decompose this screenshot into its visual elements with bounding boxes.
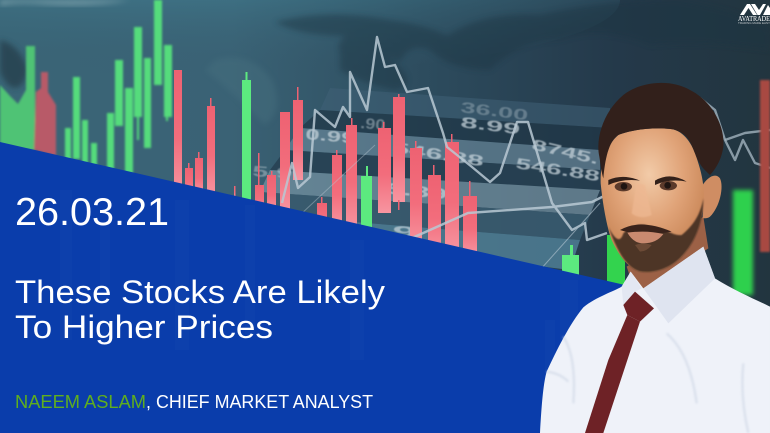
date: 26.03.21 (15, 191, 169, 234)
author byline: , CHIEF MARKET ANALYST (146, 391, 373, 412)
headline: To Higher Prices (15, 309, 273, 345)
data table stripes with figures: 5.9 (252, 163, 293, 183)
dark brown hair (598, 83, 723, 178)
data table stripes with figures: 5.89 (385, 180, 448, 203)
data table stripes with figures: 8745. (530, 136, 600, 168)
red tie (585, 292, 654, 433)
data table stripes with figures: 9 (392, 223, 417, 242)
data table stripes with figures: 0.99 (305, 126, 356, 147)
candlesticks on the right (562, 80, 770, 295)
AvaTrade logo: TRADING MADE EASY (738, 21, 770, 25)
world map silhouette (205, 0, 770, 125)
ear (703, 176, 722, 218)
data table stripes with figures (252, 88, 610, 270)
candlestick chart: blurred green and red candles on the left (0, 0, 172, 174)
candlestick chart: sharp candles in the middle (174, 70, 477, 256)
data table stripes with figures: 546.88 (391, 139, 485, 170)
white shirt (540, 247, 770, 433)
author byline: NAEEM ASLAM (15, 391, 146, 412)
headline (15, 274, 385, 345)
data table stripes with figures: 36.00 (460, 99, 529, 124)
neck (627, 217, 708, 292)
AvaTrade logo (738, 4, 770, 25)
face (601, 128, 704, 272)
author byline (15, 391, 373, 412)
data table stripes with figures: .90 (360, 115, 386, 134)
blue diagonal panel (0, 142, 625, 433)
data table stripes with figures: 8.99 (460, 114, 521, 138)
headline: These Stocks Are Likely (15, 274, 385, 310)
line chart: white price lines (282, 37, 770, 270)
portrait of the analyst (540, 83, 770, 433)
data table stripes with figures: 546.88 (514, 155, 601, 185)
